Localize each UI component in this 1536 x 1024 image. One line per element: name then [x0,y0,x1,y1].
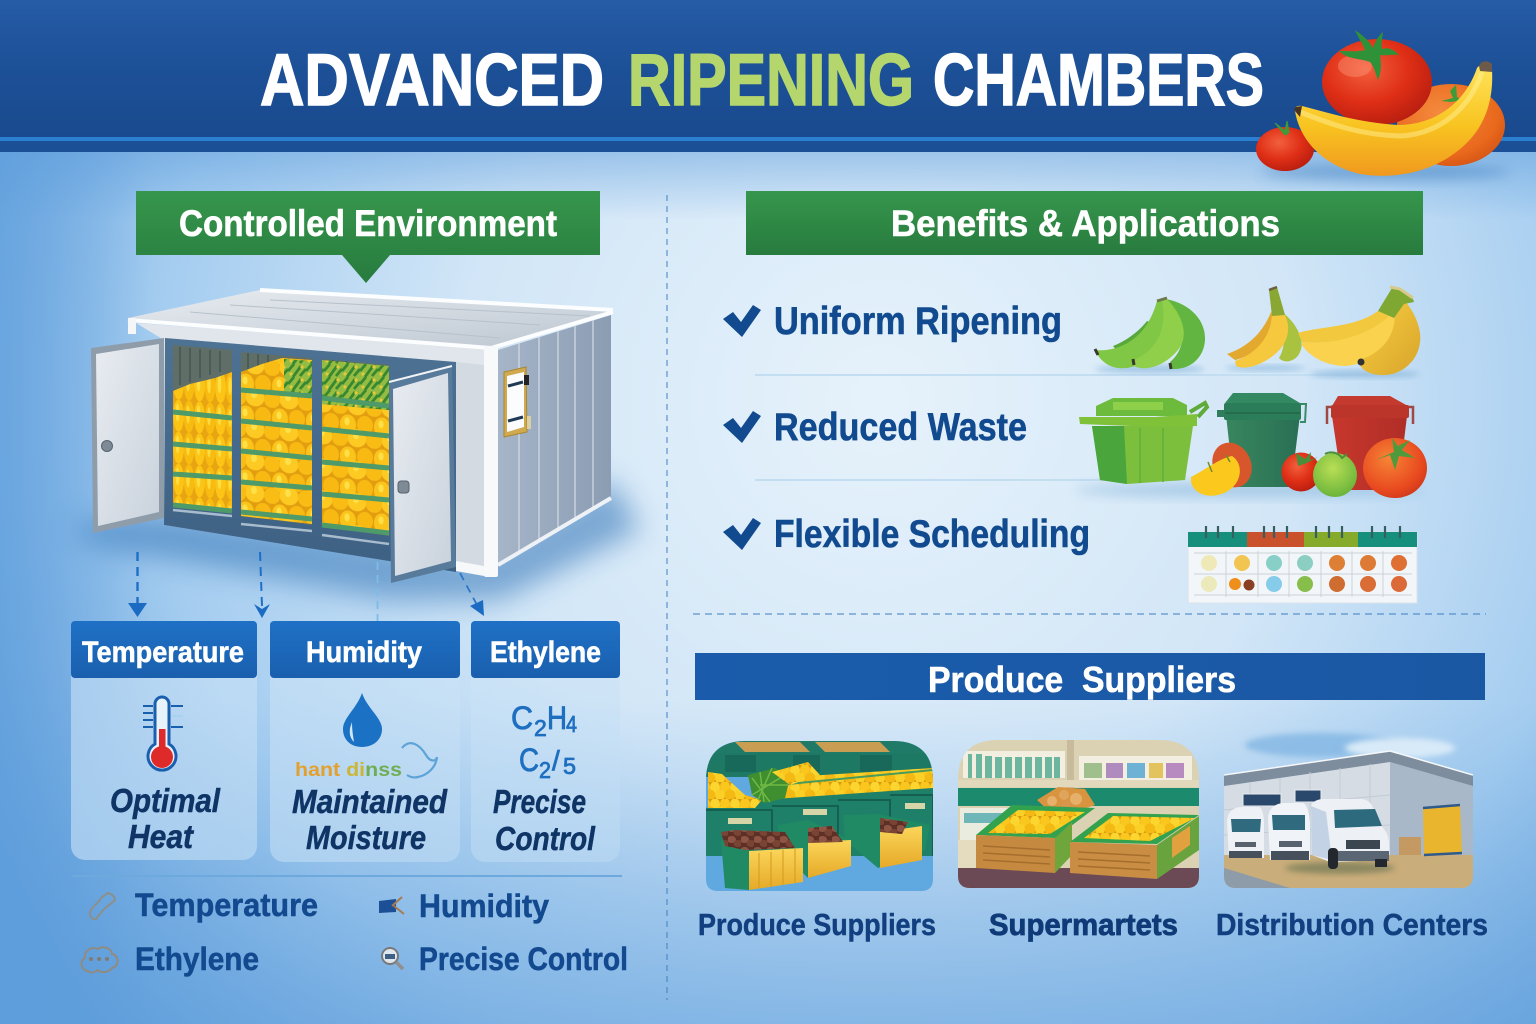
label: supermartets: Supermartets [989,907,1178,942]
title [260,40,1264,121]
formula: C2H4: H [547,700,567,736]
heading: benefits and applications [746,191,1423,255]
icon: hook [402,743,437,777]
arrow: to ethylene light [376,562,378,621]
left door [91,338,164,533]
heading: benefits and applications: Benefits & Applications [891,203,1280,244]
card: humidity [270,621,460,862]
icon: calendar [1188,526,1417,603]
legend item: humidity: Humidity [419,888,549,924]
panel: benefits and applications [723,191,1427,603]
formula: C2H4: C [511,700,533,736]
card: ethylene: Control [495,820,596,857]
heading: produce suppliers: Produce Suppliers [928,659,1236,700]
label: produce suppliers: Produce Suppliers [698,907,936,942]
panel: controlled environment [70,191,640,977]
card: temperature: Temperature [82,636,244,669]
fruit pile [1191,436,1427,498]
legend [81,887,628,977]
van middle [1268,803,1310,860]
heading: controlled environment [136,191,600,283]
formula: C2/5: / [552,745,560,776]
teal bin [1217,393,1306,487]
heading: controlled environment: Controlled Environment [179,203,557,244]
card: temperature: Optimal [110,782,221,819]
control panel [504,367,531,437]
title: CHAMBERS [933,40,1264,121]
formula: C2H4: 2 [534,715,547,741]
formula: C2/5: C [519,742,539,778]
card: ethylene: Precise [493,783,586,820]
formula: C2/5 [519,742,576,783]
card: humidity: Maintained [292,783,448,820]
legend item: precise control: Precise Control [419,941,628,977]
basket rear right [843,814,930,868]
image: produce suppliers [706,741,933,891]
legend item: ethylene [81,941,259,977]
benefit: reduced waste: Reduced Waste [774,406,1027,449]
card: humidity: Moisture [306,819,426,856]
card: ethylene [471,621,620,862]
green crate [1079,398,1207,484]
basket middle [778,820,851,878]
van right [1311,799,1389,869]
title: RIPENING [628,40,914,121]
formula: C2/5: 5 [563,753,576,779]
card: humidity: Humidity [306,636,422,669]
card: ethylene: Ethylene [490,636,601,669]
formula: C2H4: 4 [566,711,577,737]
arrow: to temperature [128,552,147,617]
crate right [1070,813,1199,879]
basket front [721,830,803,890]
image: distribution centers [1224,733,1473,888]
benefit: flexible scheduling: Flexible Scheduling [774,513,1090,556]
icon: ripening bananas [1225,287,1305,371]
illustration: ripening chamber [70,290,640,600]
title: ADVANCED [260,40,604,121]
label: distribution centers: Distribution Centers [1216,907,1488,942]
icon: yellow bananas [1298,287,1420,378]
icon: waste bins and fruit [1075,393,1427,498]
garbled caption: hant dinss [295,760,402,781]
panel: produce suppliers [695,653,1488,942]
image: supermarkets [958,740,1199,888]
header band [0,0,1536,152]
icon: thermometer [143,697,183,770]
right door [389,366,456,583]
card: temperature [71,621,257,860]
icon: water drop [343,693,382,747]
red bin [1327,396,1413,490]
legend item: temperature: Temperature [135,887,318,923]
heading: produce suppliers [695,653,1485,700]
formula: C2/5: 2 [539,757,551,783]
legend item: ethylene: Ethylene [135,941,259,977]
card: temperature: Heat [128,818,195,855]
divider: vertical dashed [666,195,668,1000]
arrow: to ethylene [460,573,484,616]
benefit: uniform ripening: Uniform Ripening [774,300,1062,343]
crate left [976,805,1095,873]
van left [1227,807,1264,858]
icon: tomatoes and banana [1256,30,1510,180]
arrow: to humidity [254,552,270,618]
icon: green bananas [1095,298,1205,373]
formula: C2H4 [511,700,577,741]
